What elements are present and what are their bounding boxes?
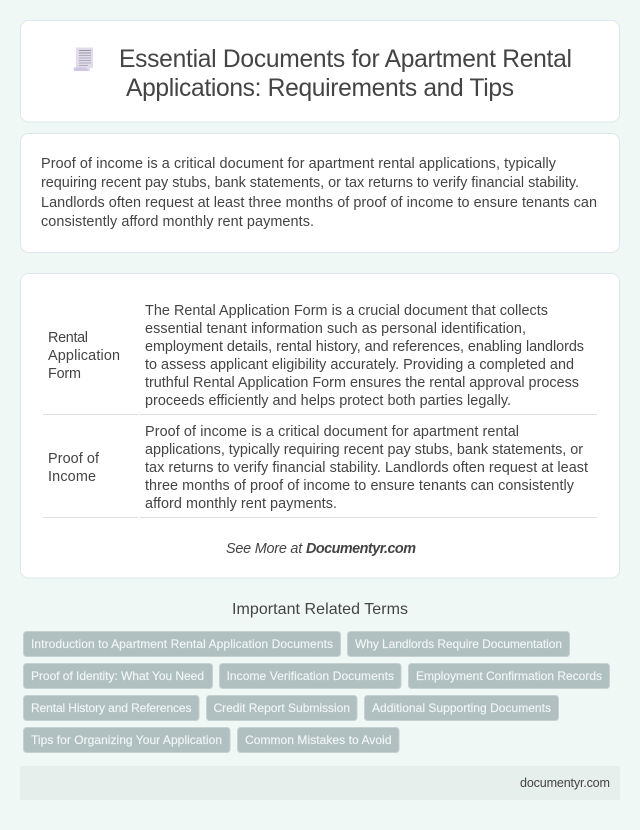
tag: Additional Supporting Documents xyxy=(372,701,551,715)
intro text xyxy=(41,156,597,230)
tag xyxy=(206,696,357,720)
intro text: requiring recent pay stubs, bank statements, or tax returns to verify financial stability. xyxy=(41,175,579,191)
row label: Rental Application Form xyxy=(48,330,120,382)
tag xyxy=(24,728,230,752)
tag: Rental History and References xyxy=(31,701,192,715)
row description: Proof of Income: applications, typically requiring recent pay stubs, bank statements, or xyxy=(145,442,583,458)
row label: Rental Application Form: Rental xyxy=(48,330,88,346)
tag: Why Landlords Require Documentation xyxy=(355,637,562,651)
row description: Proof of Income: three months of proof of income to ensure tenants can consistently xyxy=(145,478,575,494)
row description: Proof of Income: tax returns to verify financial stability. Landlords often request at least xyxy=(145,460,588,476)
see more link: Documentyr.com xyxy=(306,541,416,557)
title: Essential Documents for Apartment Rental xyxy=(119,46,572,73)
tag xyxy=(348,632,570,656)
tag: Credit Report Submission xyxy=(214,701,350,715)
tag xyxy=(220,664,401,688)
row description: Rental Application Form xyxy=(145,303,584,409)
footer xyxy=(20,766,620,800)
row label: Proof of Income: Income xyxy=(48,469,96,485)
row description: Rental Application Form: essential tenant information such as personal identification, xyxy=(145,321,526,337)
panel: documents table xyxy=(20,274,620,578)
tag: Income Verification Documents xyxy=(226,669,394,683)
title: Applications: Requirements and Tips xyxy=(126,75,514,102)
row description: Proof of Income: afford monthly rent payments. xyxy=(145,496,337,512)
tag: Common Mistakes to Avoid xyxy=(245,733,392,747)
tag: Tips for Organizing Your Application xyxy=(31,733,222,747)
icon: document scroll xyxy=(74,48,93,71)
tag xyxy=(24,632,340,656)
row description: Rental Application Form: truthful Rental Application Form ensures the rental approval process xyxy=(145,375,579,391)
row label: Rental Application Form: Application xyxy=(48,348,120,364)
tag xyxy=(364,696,558,720)
related terms tags xyxy=(24,632,610,752)
row description: Proof of Income xyxy=(145,424,588,512)
row description: Rental Application Form: proceeds efficiently and helps protect both parties legally. xyxy=(145,393,511,409)
tag xyxy=(408,664,610,688)
see more link: See More at xyxy=(226,541,306,557)
tag: Introduction to Apartment Rental Application Documents xyxy=(31,637,333,651)
row label: Proof of Income: Proof of xyxy=(48,451,100,467)
row description: Rental Application Form: to assess applicant eligibility accurately. Providing a completed and xyxy=(145,357,574,373)
tag xyxy=(24,664,212,688)
tag: Proof of Identity: What You Need xyxy=(31,669,204,683)
panel: header xyxy=(20,20,620,122)
footer: documentyr.com xyxy=(520,776,610,790)
row description: Rental Application Form: employment details, rental history, and references, enabling landlords xyxy=(145,339,584,355)
intro text: Landlords often request at least three months of proof of income to ensure tenants can xyxy=(41,195,597,211)
row description: Proof of Income: Proof of income is a critical document for apartment rental xyxy=(145,424,519,440)
tag: Employment Confirmation Records xyxy=(416,669,602,683)
panel: introduction xyxy=(20,134,620,252)
tag xyxy=(24,696,199,720)
row label: Proof of Income xyxy=(48,451,100,485)
row description: Rental Application Form: The Rental Application Form is a crucial document that collects xyxy=(145,303,548,319)
intro text: consistently afford monthly rent payments. xyxy=(41,214,314,230)
intro text: Proof of income is a critical document for apartment rental applications, typically xyxy=(41,156,557,172)
tag xyxy=(238,728,399,752)
row label: Rental Application Form: Form xyxy=(48,366,81,382)
heading: important related terms: Important Related Terms xyxy=(232,601,408,618)
